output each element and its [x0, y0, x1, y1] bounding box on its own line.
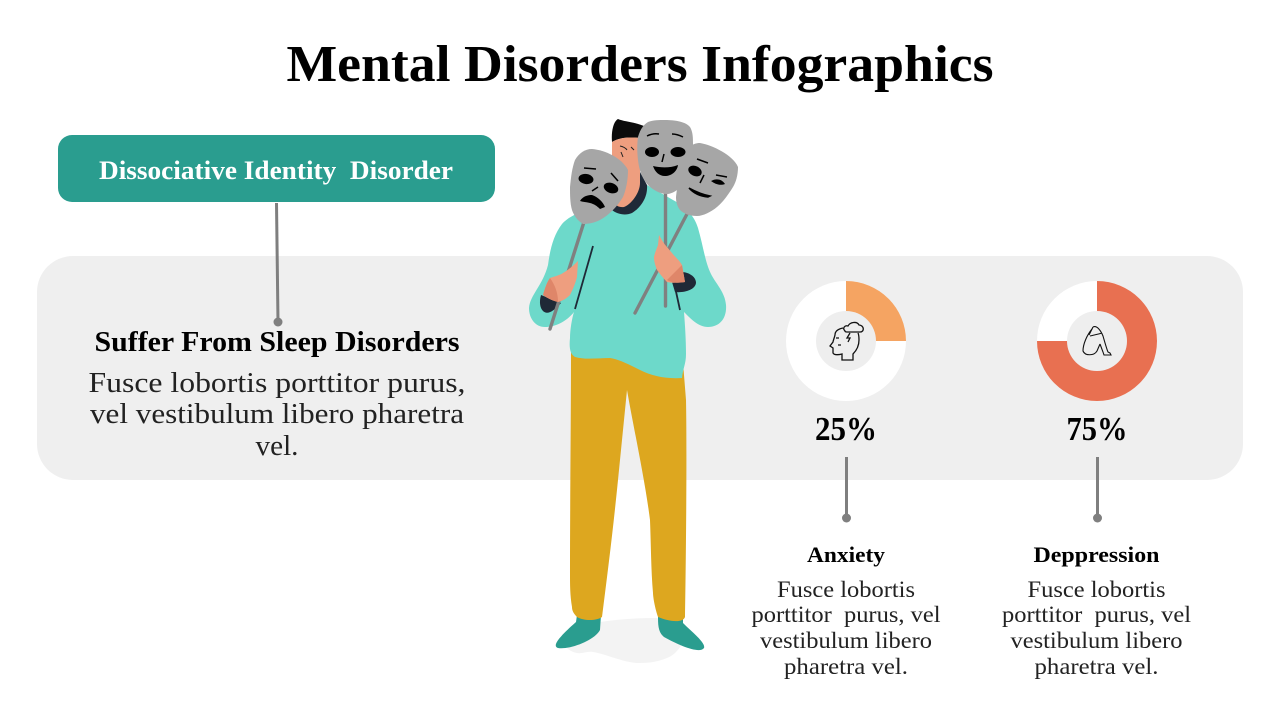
text block: anxiety — [752, 542, 940, 679]
left hand — [543, 261, 578, 302]
donut chart: depression 75% — [1037, 281, 1157, 401]
value: 75%: 75% — [1066, 411, 1128, 448]
sticks — [550, 190, 687, 329]
mask: winking — [676, 143, 738, 216]
icon: person sitting curled — [1083, 327, 1111, 355]
text block: depression: Fusce lobortis — [1028, 577, 1166, 602]
text block: sleep disorders: Fusce lobortis porttitor purus, — [88, 368, 466, 399]
text block: anxiety: Fusce lobortis — [777, 577, 915, 602]
text block: sleep disorders — [88, 327, 466, 462]
hair — [612, 119, 646, 142]
connector: depression — [1093, 457, 1102, 522]
face — [612, 137, 640, 170]
teal heading box: Dissociative Identity Disorder — [99, 155, 453, 185]
text block: sleep disorders: Suffer From Sleep Disorders — [94, 327, 460, 358]
text block: anxiety: pharetra vel. — [784, 654, 908, 679]
sweater — [529, 185, 726, 378]
connector: heading to sleep disorders — [274, 203, 282, 326]
ground shadow — [567, 618, 683, 663]
text block: anxiety: Anxiety — [807, 542, 886, 567]
background panel — [37, 256, 1243, 480]
teal heading box — [58, 135, 495, 202]
text block: depression: Deppression — [1034, 542, 1160, 567]
text block: depression: pharetra vel. — [1034, 654, 1158, 679]
shoes — [556, 615, 704, 650]
icon: head with storm cloud — [830, 322, 863, 360]
value: 25%: 25% — [815, 411, 877, 448]
text block: depression: porttitor purus, vel — [1002, 602, 1191, 627]
small face detail — [620, 146, 634, 157]
neck and collar — [612, 172, 647, 214]
mask: sad — [570, 149, 628, 224]
left cuff — [540, 295, 561, 313]
text block: depression: vestibulum libero — [1010, 628, 1182, 653]
right cuff — [672, 272, 696, 292]
mask: happy — [637, 120, 693, 194]
title: Mental Disorders Infographics — [286, 36, 994, 93]
text block: depression — [1002, 542, 1191, 679]
text block: sleep disorders: vel vestibulum libero pharetra — [90, 399, 464, 430]
trousers — [570, 350, 686, 621]
donut chart: anxiety 25% — [786, 281, 906, 401]
text block: anxiety: vestibulum libero — [760, 628, 932, 653]
illustration: man holding masks — [529, 119, 738, 663]
sweater fold lines — [575, 246, 680, 310]
text block: anxiety: porttitor purus, vel — [752, 602, 940, 627]
text block: sleep disorders: vel. — [256, 431, 298, 462]
connector: anxiety — [842, 457, 851, 522]
right hand — [654, 235, 685, 283]
